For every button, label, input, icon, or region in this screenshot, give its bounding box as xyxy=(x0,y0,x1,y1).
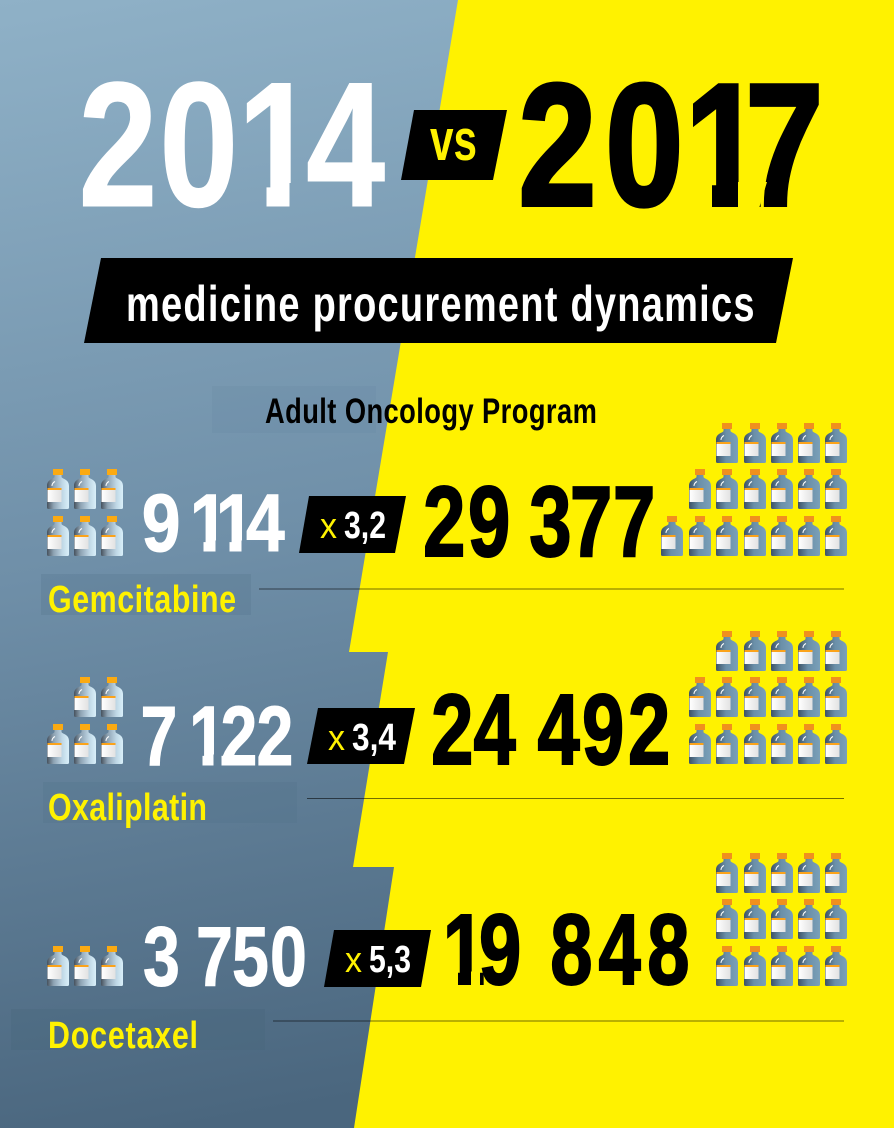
value 2014: 3 750 xyxy=(143,910,307,1004)
label panel: Oxaliplatin: Oxaliplatin xyxy=(48,787,207,829)
label panel: Oxaliplatin xyxy=(43,782,297,829)
multiplier badge: 5,3 xyxy=(369,939,411,981)
label panel: Gemcitabine: Gemcitabine xyxy=(48,579,236,621)
value 2017: 19 848 xyxy=(443,894,690,1005)
row: Docetaxel xyxy=(11,853,847,1057)
icons: 2017 vials xyxy=(661,423,847,556)
value 2014: 7 122 xyxy=(140,690,293,784)
multiplier badge: 3,2 xyxy=(344,505,386,547)
vs badge xyxy=(401,108,507,180)
value 2017: 24 492 xyxy=(431,674,670,785)
subtitle banner xyxy=(84,258,793,343)
multiplier badge xyxy=(307,708,415,764)
background: yellow stepped panel xyxy=(349,0,894,1128)
multiplier badge xyxy=(324,930,431,987)
multiplier badge: x xyxy=(345,939,362,980)
icons: 2017 vials xyxy=(716,853,847,986)
multiplier badge: x xyxy=(328,717,345,758)
title year 2017: 2017 xyxy=(519,49,823,242)
row: Gemcitabine xyxy=(41,423,847,621)
icons: 2014 vials xyxy=(47,469,123,556)
title xyxy=(82,81,819,209)
value 2017: 29 377 xyxy=(423,466,655,577)
label panel: Docetaxel xyxy=(11,1009,265,1057)
multiplier badge xyxy=(299,496,406,553)
subtitle banner: medicine procurement dynamics xyxy=(126,277,755,332)
icons: 2014 vials xyxy=(47,677,123,764)
row: Oxaliplatin xyxy=(43,631,847,829)
vs badge: vs xyxy=(430,108,477,173)
label panel: Docetaxel: Docetaxel xyxy=(48,1015,198,1057)
value 2014: 9 114 xyxy=(142,478,285,569)
icons: 2017 vials xyxy=(689,631,847,764)
program heading: Adult Oncology Program xyxy=(265,392,597,431)
title year 2014: 2014 xyxy=(78,46,385,245)
multiplier badge: 3,4 xyxy=(352,717,396,759)
icons: 2014 vials xyxy=(47,946,123,986)
multiplier badge: x xyxy=(320,505,337,546)
